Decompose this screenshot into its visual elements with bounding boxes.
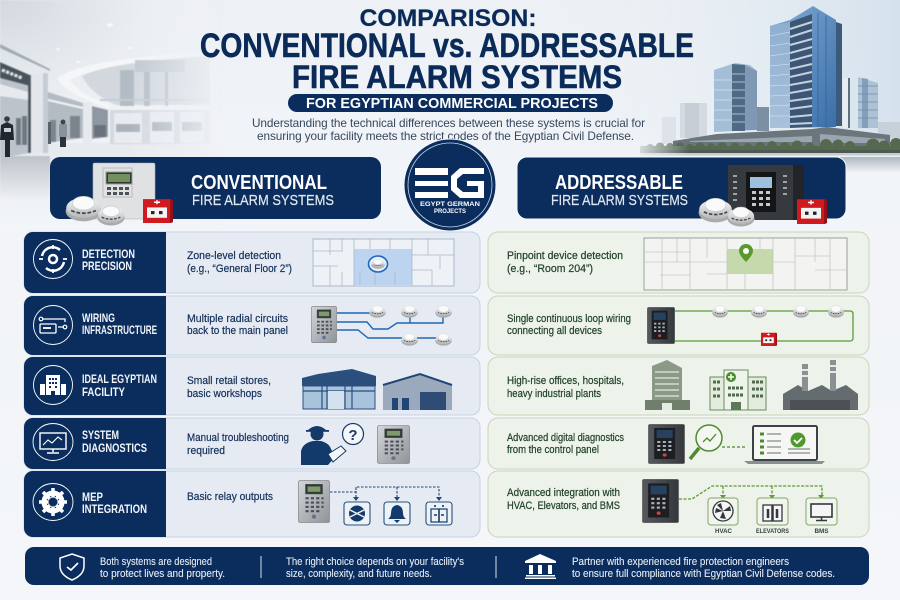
heading: INFRASTRUCTURE [82, 323, 157, 337]
logo: Egypt German Projects [404, 139, 496, 231]
icon: laptop with report [744, 426, 825, 464]
intro paragraph: Understanding the technical differences between these systems is crucial for [252, 116, 645, 130]
icon: target [34, 240, 72, 278]
intro paragraph [252, 116, 645, 143]
heading: PRECISION [82, 259, 132, 273]
text: back to the main panel [187, 325, 288, 337]
title: FIRE ALARM SYSTEMS [292, 59, 622, 95]
floor plan with pin [644, 238, 847, 290]
heading: WIRING [82, 311, 115, 325]
icon: panel [649, 424, 684, 464]
text: High-rise offices, hospitals, [507, 375, 624, 387]
footer text 3 [572, 556, 835, 580]
text [507, 375, 624, 400]
conventional panel and devices [66, 163, 173, 225]
banner: addressable: ADDRESSABLE [555, 172, 683, 194]
text: (e.g., “General Floor 2”) [187, 263, 292, 275]
icon: buildings [34, 366, 72, 404]
banner: conventional: CONVENTIONAL [191, 172, 327, 194]
footer text 2: size, complexity, and future needs. [286, 568, 432, 580]
heading: FACILITY [82, 385, 125, 399]
text: Manual troubleshooting [187, 432, 289, 444]
text [507, 487, 620, 512]
upper curved balcony [58, 58, 138, 96]
row 2 right: loop wiring [488, 296, 869, 355]
text [187, 375, 271, 400]
icon: panel [378, 425, 409, 464]
title: COMPARISON: [360, 5, 536, 32]
text: Basic relay outputs [187, 491, 273, 503]
heading [82, 372, 157, 399]
background photo: shopping mall interior [0, 0, 207, 196]
footer text 1: Both systems are designed [100, 556, 212, 568]
heading [82, 311, 157, 337]
addressable panel and devices [699, 165, 827, 226]
device labels: BMS [814, 528, 829, 535]
banner: addressable [517, 157, 846, 226]
icon: institution [525, 554, 556, 579]
icon: gear [33, 484, 73, 520]
row 1 right: pinpoint detection [488, 232, 869, 293]
heading: IDEAL EGYPTIAN [82, 372, 157, 386]
icon: shield [60, 554, 84, 580]
intro paragraph: ensuring your facility meets the strict codes of the Egyptian Civil Defense. [257, 129, 634, 143]
text: Zone-level detection [187, 250, 281, 262]
banner: addressable: FIRE ALARM SYSTEMS [551, 192, 688, 209]
icon: technician with question [301, 424, 364, 465]
row 5 right: advanced integration [488, 471, 869, 537]
footer text 1: to protect lives and property. [100, 568, 225, 580]
floor plan with zone highlight [313, 239, 454, 286]
radial wiring diagram [311, 306, 452, 346]
row 4 left: system diagnostics [24, 418, 480, 469]
row 3 right: ideal facility [488, 357, 869, 415]
icon: office tower [645, 360, 690, 410]
text: heavy industrial plants [507, 388, 601, 400]
text: Single continuous loop wiring [507, 313, 631, 325]
banner: conventional [50, 157, 381, 225]
footer text 3: to ensure full compliance with Egyptian Civil Defense codes. [572, 568, 835, 580]
heading: DETECTION [82, 247, 135, 261]
device labels [715, 528, 829, 535]
footer text 3: Partner with experienced fire protection engineers [572, 556, 789, 568]
heading [82, 247, 135, 273]
subtitle pill: FOR EGYPTIAN COMMERCIAL PROJECTS [306, 95, 598, 112]
heading: MEP [82, 490, 103, 504]
banner: conventional: FIRE ALARM SYSTEMS [192, 192, 334, 209]
text: Multiple radial circuits [187, 313, 288, 325]
icon: technician with question: ? [348, 427, 358, 444]
text: (e.g., “Room 204”) [507, 263, 593, 275]
logo: Egypt German Projects: EGYPT GERMAN [420, 201, 480, 208]
text [187, 250, 292, 275]
text [507, 432, 624, 456]
icon: wiring [34, 306, 72, 344]
background photo: sky and city skyline [640, 0, 900, 170]
device labels: ELEVATORS [756, 528, 790, 535]
heading: SYSTEM [82, 428, 119, 442]
store fronts [0, 78, 29, 156]
logo: Egypt German Projects: PROJECTS [434, 208, 467, 215]
text: Small retail stores, [187, 375, 271, 387]
text [507, 313, 631, 337]
loop wiring diagram [647, 306, 853, 346]
device labels: HVAC [715, 528, 732, 535]
text: connecting all devices [507, 325, 602, 337]
integration diagram [643, 480, 837, 535]
footer banner [25, 547, 869, 585]
title: CONVENTIONAL vs. ADDRESSABLE [200, 27, 694, 65]
text: Advanced integration with [507, 487, 620, 499]
row 1 left: detection precision [24, 232, 480, 293]
footer text 2 [286, 556, 464, 580]
row 3 left: ideal Egyptian facility [24, 357, 480, 415]
text: required [187, 445, 225, 457]
text: from the control panel [507, 444, 599, 456]
text [507, 250, 623, 275]
row 2 left: wiring infrastructure [24, 296, 480, 355]
heading [82, 428, 147, 455]
lower store fronts [110, 110, 195, 144]
footer text 1 [100, 556, 225, 580]
shoppers [0, 116, 67, 157]
heading: DIAGNOSTICS [82, 441, 147, 455]
icon: magnifier with trend [690, 425, 745, 459]
row 5 left: MEP integration [24, 471, 480, 537]
footer text 2: The right choice depends on your facility's [286, 556, 464, 568]
heading: INTEGRATION [82, 502, 147, 516]
text [187, 313, 288, 337]
text: Advanced digital diagnostics [507, 432, 624, 444]
text: basic workshops [187, 388, 262, 400]
heading [82, 490, 147, 516]
icon: monitor with chart [33, 424, 73, 460]
relay diagram [299, 481, 452, 525]
row 4 right: digital diagnostics [488, 418, 869, 469]
icons: retail store and workshop [302, 369, 452, 410]
text [187, 432, 289, 457]
text: Pinpoint device detection [507, 250, 623, 262]
title [200, 5, 694, 95]
icon: factory [783, 360, 858, 410]
icon: hospital [710, 370, 766, 410]
text: HVAC, Elevators, and BMS [507, 500, 620, 512]
